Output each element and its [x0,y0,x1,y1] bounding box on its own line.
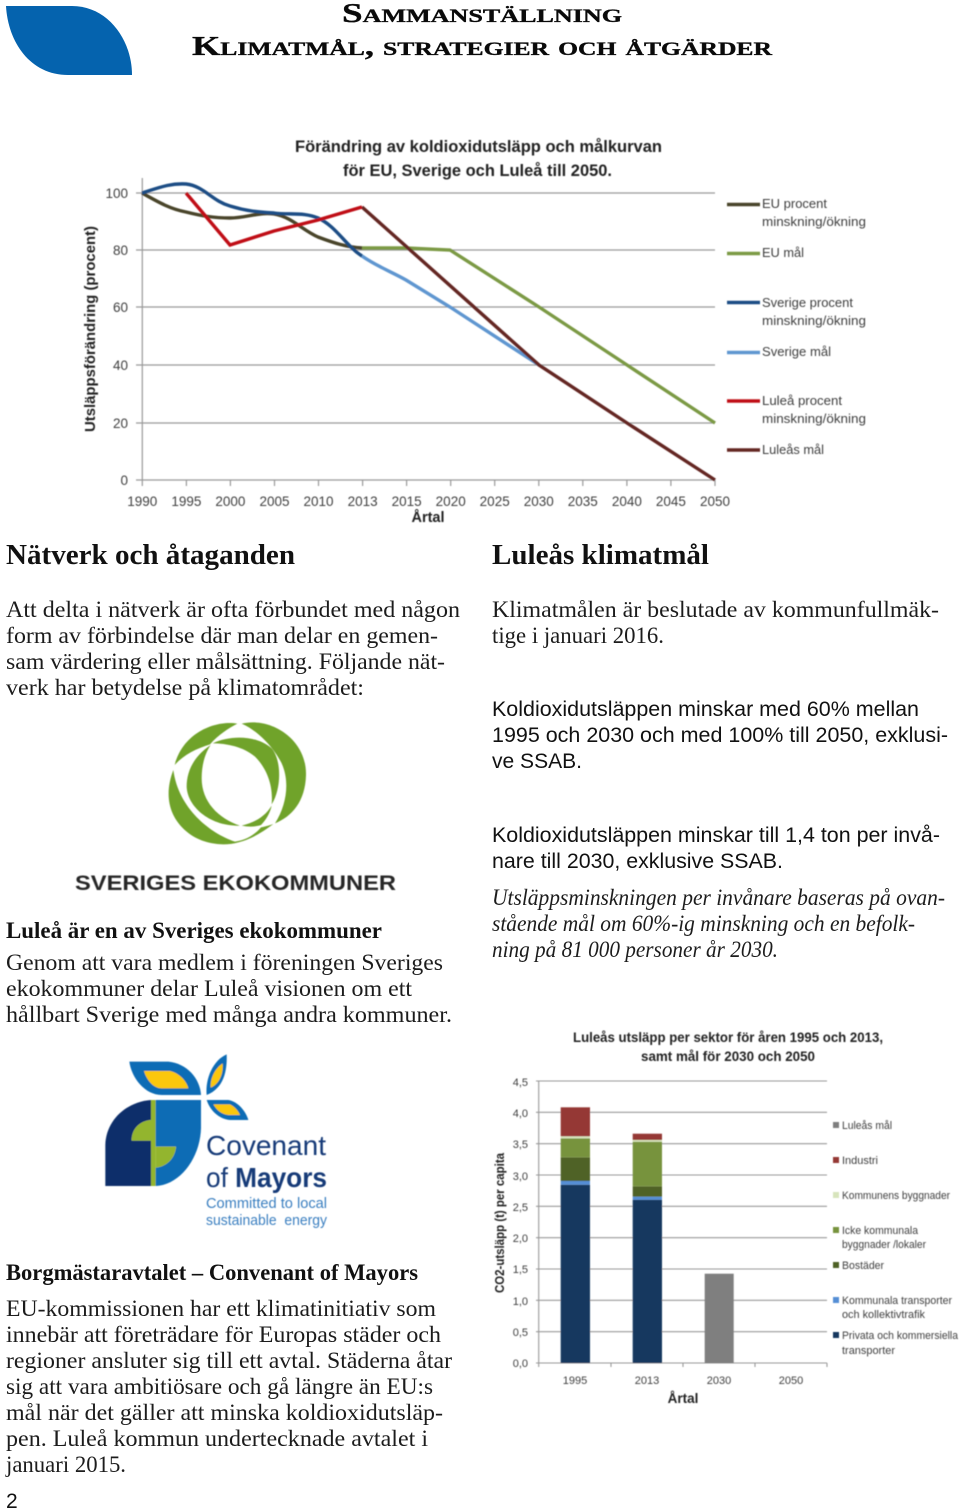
legend: byggnader /lokaler [842,1239,926,1251]
text block: nätverk intro: verk har betydelse på klimatområdet: [6,675,364,700]
legend [727,196,866,457]
legend: Sverige mål [762,344,831,359]
text block: 1,4 ton target: nare till 2030, exklusive SSAB. [492,849,783,873]
chart title [573,1030,883,1064]
heading: Luleås klimatmål: Luleås klimatmål [492,539,709,571]
text block: klimatmål decision: tige i januari 2016. [492,623,664,648]
title: Klimatmål, strategier och åtgärder [192,31,772,61]
text block: nätverk intro: form av förbindelse där man delar en gemen- [6,623,438,648]
text block: Covenant of Mayors: EU-kommissionen har ett klimatinitiativ som [6,1296,436,1321]
legend: Luleå procent [762,393,842,408]
x axis labels [563,1375,803,1387]
x axis labels: 2030 [524,494,554,509]
text block: klimatmål decision: Klimatmålen är beslutade av kommunfullmäk- [492,597,939,622]
x axis labels [127,494,730,509]
x axis labels: 2015 [392,494,422,509]
y axis labels: 4,0 [513,1108,528,1120]
x axis labels: 2005 [259,494,290,509]
subheading: ekokommuner: Luleå är en av Sveriges ekokommuner [6,918,382,943]
icon: green rings [169,722,306,844]
y axis labels [105,186,128,488]
chart title: Luleås utsläpp per sektor för åren 1995 och 2013, [573,1030,883,1045]
text block: ekokommuner: hållbart Sverige med många andra kommuner. [6,1002,452,1027]
subheading: Borgmästaravtalet: Borgmästaravtalet – Convenant of Mayors [6,1260,418,1285]
y axis title: Utsläppsförändring (procent) [83,226,99,432]
x axis labels: 1990 [127,494,157,509]
y axis labels [513,1077,528,1370]
x axis title: Årtal [411,509,445,526]
text block: Covenant of Mayors: innebär att företrädare för Europas städer och [6,1322,442,1347]
x axis labels: 2020 [436,494,466,509]
legend: EU procent [762,196,827,211]
y axis title: CO2-utsläpp (t) per capita [493,1152,507,1293]
x axis labels: 2035 [568,494,598,509]
legend: Kommunala transporter [842,1295,952,1307]
y axis labels: 4,5 [513,1077,528,1089]
text block: nätverk intro [6,597,461,700]
text block: 60 percent target: ve SSAB. [492,749,582,773]
text block: italic note: ning på 81 000 personer år 2030. [492,937,778,962]
bar chart: emissions per sector [493,1030,959,1406]
logo text: of Mayors [206,1162,327,1193]
legend: Luleås mål [762,442,824,457]
text block: italic note [492,885,945,962]
text block: 1,4 ton target: Koldioxidutsläppen minskar till 1,4 ton per invå- [492,823,940,847]
x axis labels: 2013 [635,1375,659,1387]
text block: Covenant of Mayors: sig att vara ambitiösare och gå längre än EU:s [6,1374,433,1399]
chart title: samt mål för 2030 och 2050 [641,1049,815,1064]
y axis labels: 1,5 [513,1264,528,1276]
x axis labels: 2010 [303,494,334,509]
legend: Bostäder [842,1260,884,1272]
icon: blue leaf [6,6,132,75]
x axis labels: 2045 [656,494,686,509]
y axis labels: 0,5 [513,1327,528,1339]
y axis labels: 2,5 [513,1202,528,1214]
x axis labels: 2050 [779,1375,803,1387]
logo text: Committed to local [206,1196,327,1212]
icon: leaves and body [105,1054,248,1186]
x axis title: Årtal [668,1391,698,1406]
x axis labels: 2050 [700,494,730,509]
legend: och kollektivtrafik [842,1309,925,1321]
legend: transporter [842,1345,895,1357]
logo text: sustainable energy [206,1213,328,1229]
legend: minskning/ökning [762,411,866,426]
x axis labels: 2030 [707,1375,731,1387]
logo: Covenant of Mayors [105,1054,328,1229]
series: Sverige procent [142,184,362,256]
y axis labels: 80 [113,243,128,258]
bar: 2013 [633,1134,662,1363]
text block: klimatmål decision [492,597,939,648]
x axis labels: 1995 [171,494,201,509]
logo text [206,1130,328,1229]
series: Luleås mål [362,207,715,480]
logo: Sveriges Ekokommuner [75,722,397,895]
text block: ekokommuner: ekokommuner delar Luleå visionen om ett [6,976,413,1001]
legend: Industri [842,1155,878,1167]
x axis labels: 2000 [215,494,245,509]
y axis labels: 1,0 [513,1296,528,1308]
y axis labels: 2,0 [513,1233,528,1245]
series: Luleå procent [186,193,362,245]
logo text: Covenant [206,1130,326,1161]
legend: Luleås mål [842,1120,892,1132]
text block: nätverk intro: sam värdering eller målsättning. Följande nät- [6,649,445,674]
text block: 60 percent target [492,697,948,773]
y axis labels: 20 [113,416,128,431]
legend: Icke kommunala [842,1225,919,1237]
text block: Covenant of Mayors: mål när det gäller att minska koldioxidutsläp- [6,1400,443,1425]
text block: Covenant of Mayors: januari 2015. [5,1452,126,1477]
text block: Covenant of Mayors [5,1296,452,1477]
x axis labels: 2013 [348,494,378,509]
text block: 1,4 ton target [492,823,940,873]
text block: ekokommuner: Genom att vara medlem i föreningen Sveriges [6,950,443,975]
text block: italic note: stående mål om 60%-ig minskning och en befolk- [492,911,915,936]
y axis labels: 0,0 [513,1358,528,1370]
heading: Nätverk och åtaganden: Nätverk och åtaganden [6,539,295,571]
text block: ekokommuner [6,950,452,1027]
series: EU procent [142,193,362,248]
text block: 60 percent target: 1995 och 2030 och med 100% till 2050, exklusi- [492,723,948,747]
legend: minskning/ökning [762,313,866,328]
y axis labels: 100 [105,186,128,201]
x axis labels: 1995 [563,1375,587,1387]
x axis labels: 2040 [612,494,642,509]
y axis labels: 60 [113,300,128,315]
y axis labels: 40 [113,358,128,373]
chart title [295,138,662,180]
chart title: för EU, Sverige och Luleå till 2050. [343,162,612,180]
title [192,0,772,61]
y axis labels: 3,0 [513,1171,528,1183]
series: Sverige mål [362,256,539,365]
text block: Covenant of Mayors: regioner ansluter sig till ett avtal. Städerna åtar [6,1348,452,1373]
bar: 2030 [705,1274,734,1363]
text block: nätverk intro: Att delta i nätverk är ofta förbundet med någon [6,597,461,622]
legend [833,1120,959,1357]
text block: Covenant of Mayors: pen. Luleå kommun undertecknade avtalet i [6,1426,428,1451]
legend: EU mål [762,245,804,260]
chart title: Förändring av koldioxidutsläpp och målkurvan [295,138,662,156]
legend: minskning/ökning [762,214,866,229]
y axis labels: 3,5 [513,1139,528,1151]
legend: Kommunens byggnader [842,1190,950,1202]
y axis labels: 0 [120,473,128,488]
line chart: emission change [83,138,866,526]
x axis labels: 2025 [480,494,510,509]
bar: 1995 [561,1107,590,1363]
logo text: SVERIGES EKOKOMMUNER [75,871,397,895]
legend: Sverige procent [762,295,853,310]
text block: 60 percent target: Koldioxidutsläppen minskar med 60% mellan [492,697,919,721]
series: EU mål [362,248,715,423]
